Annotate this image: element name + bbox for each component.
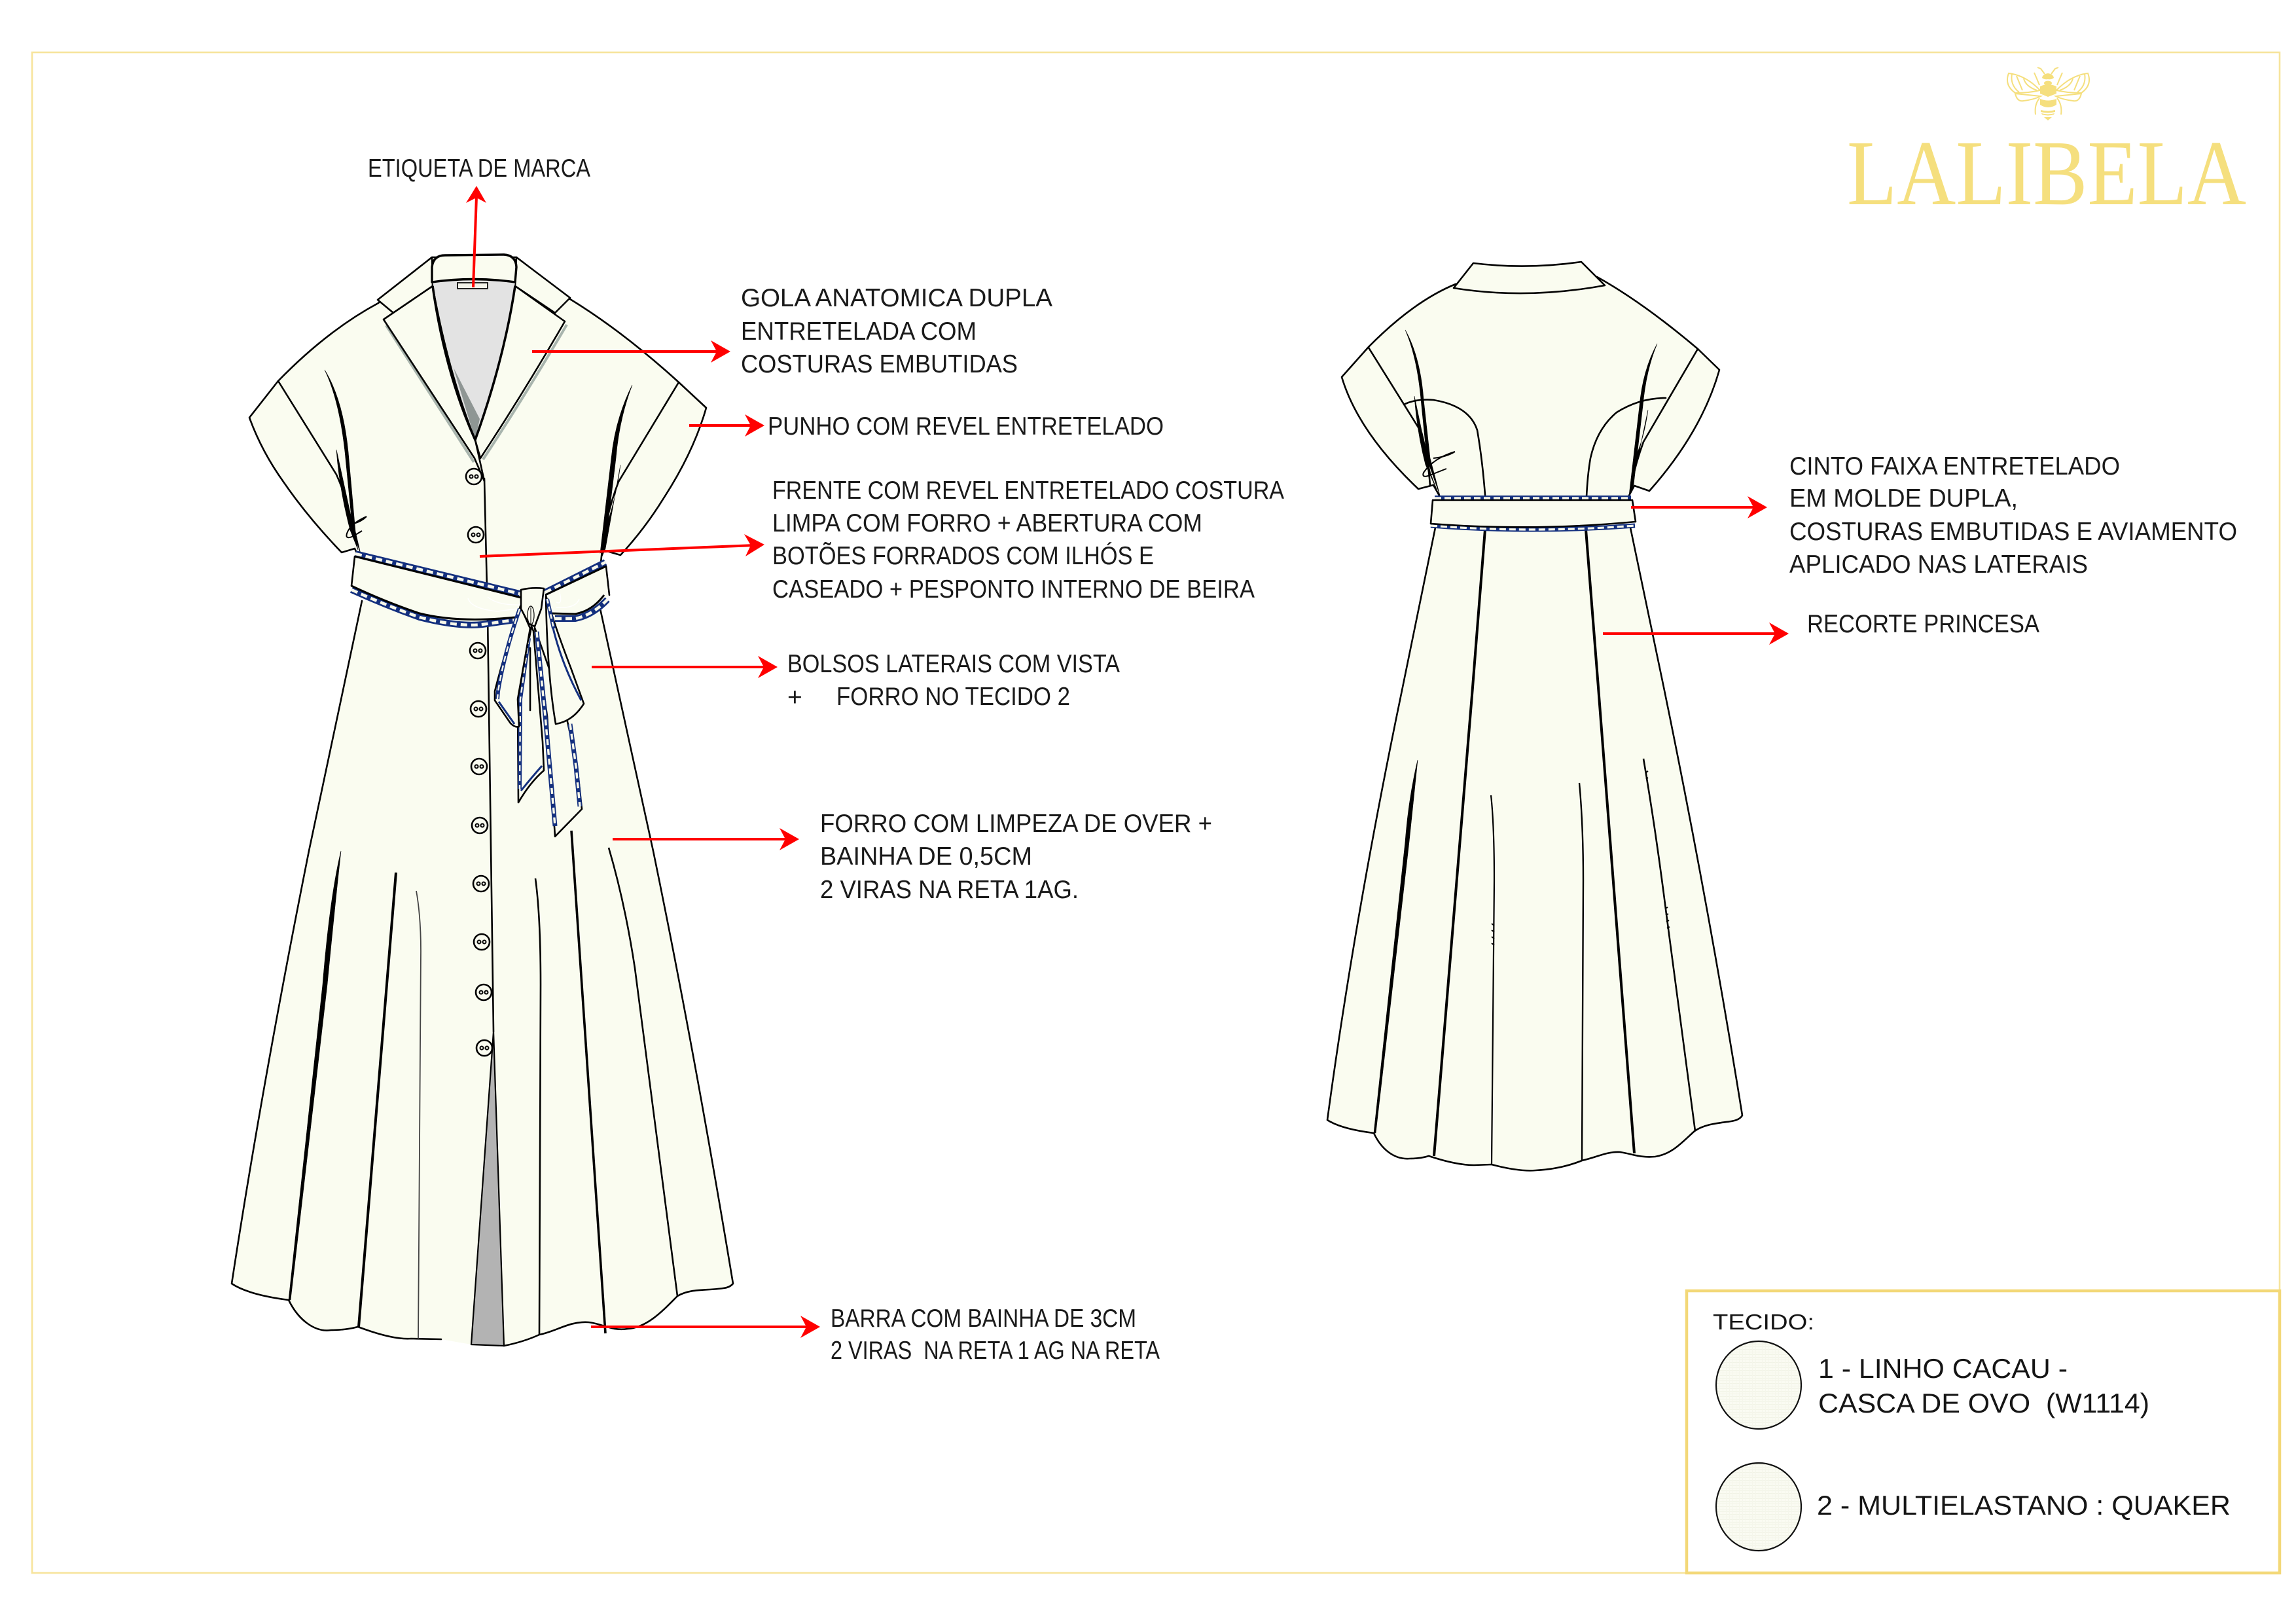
label: hem: BARRA COM BAINHA DE 3CM [831,1305,1136,1333]
fabric swatch 1 [1716,1341,1801,1429]
label: hem: 2 VIRAS NA RETA 1 AG NA RETA [831,1337,1160,1365]
front skirt seams [289,831,677,1339]
label: pockets: FORRO NO TECIDO 2 [836,683,1070,711]
fabric 1 text: 1 - LINHO CACAU - [1818,1353,2068,1384]
label: lining: FORRO COM LIMPEZA DE OVER + [820,810,1212,838]
logo wordmark: LALIBELA [1847,121,2246,225]
label: hem [831,1305,1160,1365]
arrow: brand label [466,186,486,287]
front belt with piping [351,554,609,625]
label: lining: BAINHA DE 0,5CM [820,842,1032,871]
arrow: lining [613,828,799,850]
front placket line [484,478,493,1032]
front dress drawing [232,255,733,1346]
front collar and lapels [378,255,570,481]
front opening wedge [471,1032,504,1346]
belt tie [495,588,584,837]
right tie tail [535,628,582,837]
label: belt: COSTURAS EMBUTIDAS E AVIAMENTO [1789,518,2237,546]
label: collar: GOLA ANATOMICA DUPLA [741,284,1052,312]
fabric 1 text: CASCA DE OVO (W1114) [1818,1388,2149,1418]
arrow: pockets [592,656,778,678]
label: belt: EM MOLDE DUPLA, [1789,484,2018,513]
front skirt [232,601,733,1346]
arrow: belt [1631,496,1767,518]
panel: fabric legend [1687,1291,2280,1573]
left tie tail [518,626,544,803]
label: belt: CINTO FAIXA ENTRETELADO [1789,452,2120,480]
front bodice and sleeves [249,257,706,599]
back sleeve cuffs, folds and princess seams [1369,330,1698,526]
label: pockets: BOLSOS LATERAIS COM VISTA [787,650,1120,678]
back bodice and sleeves [1342,277,1719,496]
belt knot [521,588,544,626]
label: cuff: PUNHO COM REVEL ENTRETELADO [768,412,1164,441]
label: lining: 2 VIRAS NA RETA 1AG. [820,876,1079,904]
logo: Lalibela [1847,67,2246,225]
icon: bee [2007,67,2089,120]
left tie loop [495,606,530,727]
arrow: cuff [689,414,764,437]
arrow: princess seam [1603,623,1789,645]
label: front facing [772,477,1284,604]
label: front facing: BOTÕES FORRADOS COM ILHÓS E [772,541,1154,570]
back skirt [1327,528,1742,1170]
arrow: front facing [480,534,764,556]
label: princess seam: RECORTE PRINCESA [1807,610,2039,638]
label: brand label: ETIQUETA DE MARCA [368,154,590,183]
front sleeve cuffs and folds [278,370,679,556]
label: collar [741,284,1052,378]
arrow: hem [591,1316,820,1338]
label: collar: ENTRETELADA COM [741,317,977,346]
back dress drawing [1327,262,1742,1170]
fabric legend heading: TECIDO: [1713,1310,1814,1334]
arrow: collar [532,340,730,363]
brand label [457,283,488,289]
fabric 2 text: 2 - MULTIELASTANO : QUAKER [1817,1490,2231,1521]
label: front facing: CASEADO + PESPONTO INTERNO DE BEIRA [772,575,1255,604]
label: front facing: LIMPA COM FORRO + ABERTURA COM [772,509,1202,537]
label: pockets [787,650,1120,712]
label: belt [1789,452,2237,579]
fabric 1 text [1818,1353,2149,1418]
back skirt seams [1374,530,1695,1164]
fabric swatch 2 [1716,1463,1801,1551]
back collar [1454,262,1605,293]
label: lining [820,810,1212,904]
label: front facing: FRENTE COM REVEL ENTRETELADO COSTURA [772,477,1284,505]
front buttons [466,469,492,1056]
right tie loop [546,596,584,724]
back belt with piping [1431,498,1636,530]
label: belt: APLICADO NAS LATERAIS [1789,550,2088,579]
label: pockets: + [787,683,802,712]
label: collar: COSTURAS EMBUTIDAS [741,350,1018,378]
